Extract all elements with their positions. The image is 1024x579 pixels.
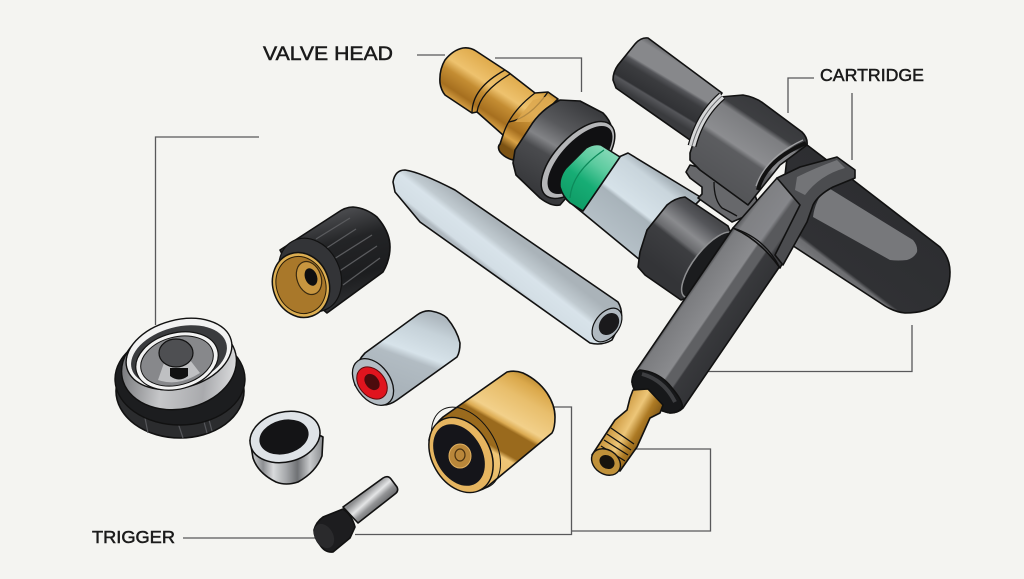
part: brass cylinder: [416, 371, 555, 504]
leader lines: valve head: [417, 55, 582, 92]
part: long silver cartridge: [393, 170, 628, 347]
label: trigger: TRIGGER: [92, 527, 175, 547]
leader lines: cartridge: [788, 78, 852, 160]
part: silver tube: [567, 153, 702, 260]
part: trigger pin: [310, 477, 398, 552]
part: round cap with push button: [113, 307, 245, 438]
part: main horizontal dark tube: [778, 132, 950, 313]
label: cartridge: CARTRIDGE: [820, 65, 924, 85]
leader line: upper-left cap: [156, 137, 259, 325]
part: black coupling ring: [513, 100, 628, 211]
part: dark sleeve: [638, 197, 745, 306]
leader line: trigger: [183, 537, 315, 539]
part: flange behind handle: [686, 165, 760, 222]
part: small metal ring: [245, 404, 325, 484]
leader line: threaded tip: [571, 449, 710, 531]
part: upper dark tube: [613, 38, 722, 140]
part: T handle: [632, 157, 855, 413]
part: green seal: [560, 144, 620, 211]
leader line: gold cylinder to trigger: [355, 407, 572, 534]
part: grooved collar: [690, 95, 807, 205]
part: silver cylinder with red seal: [344, 311, 460, 413]
part: black knurled knob with brass face: [263, 207, 390, 326]
label: valve head: VALVE HEAD: [263, 44, 393, 65]
part: threaded brass tip: [586, 389, 663, 481]
part: brass valve head: [440, 48, 558, 160]
leader line: right handle: [705, 325, 912, 372]
